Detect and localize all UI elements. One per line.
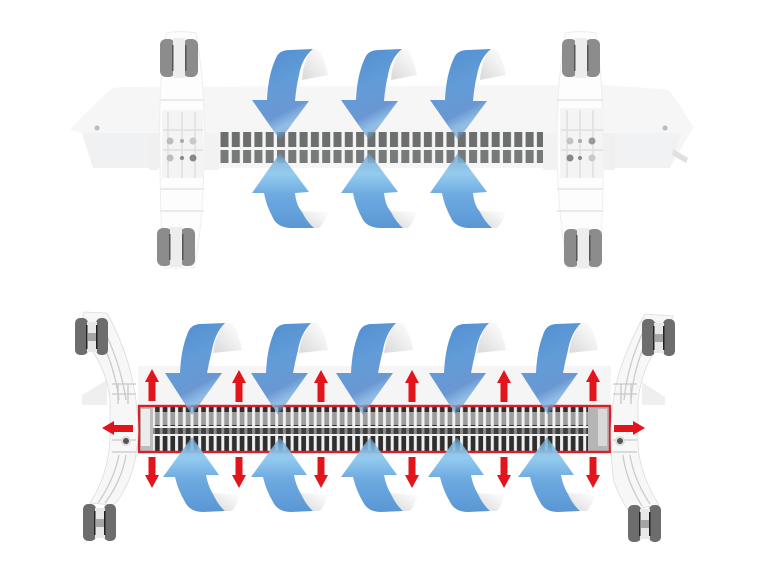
grille with red outline [139, 406, 610, 452]
right curved bracket [611, 314, 673, 510]
bottom airflow arrows [163, 323, 598, 512]
airflow pair 2 [341, 49, 417, 228]
airflow pair 3 [336, 323, 418, 512]
airflow pair 5 [518, 323, 598, 512]
right arrow [614, 421, 645, 435]
left fin [82, 380, 107, 405]
down arrows [145, 457, 600, 488]
up arrows [145, 369, 600, 402]
left top wheel [75, 318, 108, 355]
airflow pair 1 [163, 323, 242, 512]
right fin [642, 382, 665, 405]
grille top [219, 131, 543, 164]
left top wheel [160, 38, 198, 78]
left arrow [102, 421, 133, 435]
airflow pair 3 [430, 49, 506, 228]
left curved bracket [80, 312, 138, 505]
power cord [672, 149, 688, 163]
right top wheel [642, 319, 675, 356]
bottom heater [75, 312, 675, 542]
heater body [70, 85, 694, 168]
top heater [70, 32, 694, 268]
left wheel bracket [149, 32, 219, 268]
airflow pair 1 [252, 49, 328, 228]
left bottom wheel [157, 227, 195, 267]
right bottom wheel [564, 228, 602, 268]
airflow pair 4 [428, 323, 506, 512]
right top wheel [562, 38, 600, 78]
left bottom wheel [83, 504, 116, 541]
right bottom wheel [628, 505, 661, 542]
right wheel bracket [543, 32, 615, 268]
airflow pair 2 [251, 323, 328, 512]
top airflow arrows [252, 49, 506, 228]
red heat arrows [102, 369, 645, 488]
heater body [138, 366, 611, 406]
